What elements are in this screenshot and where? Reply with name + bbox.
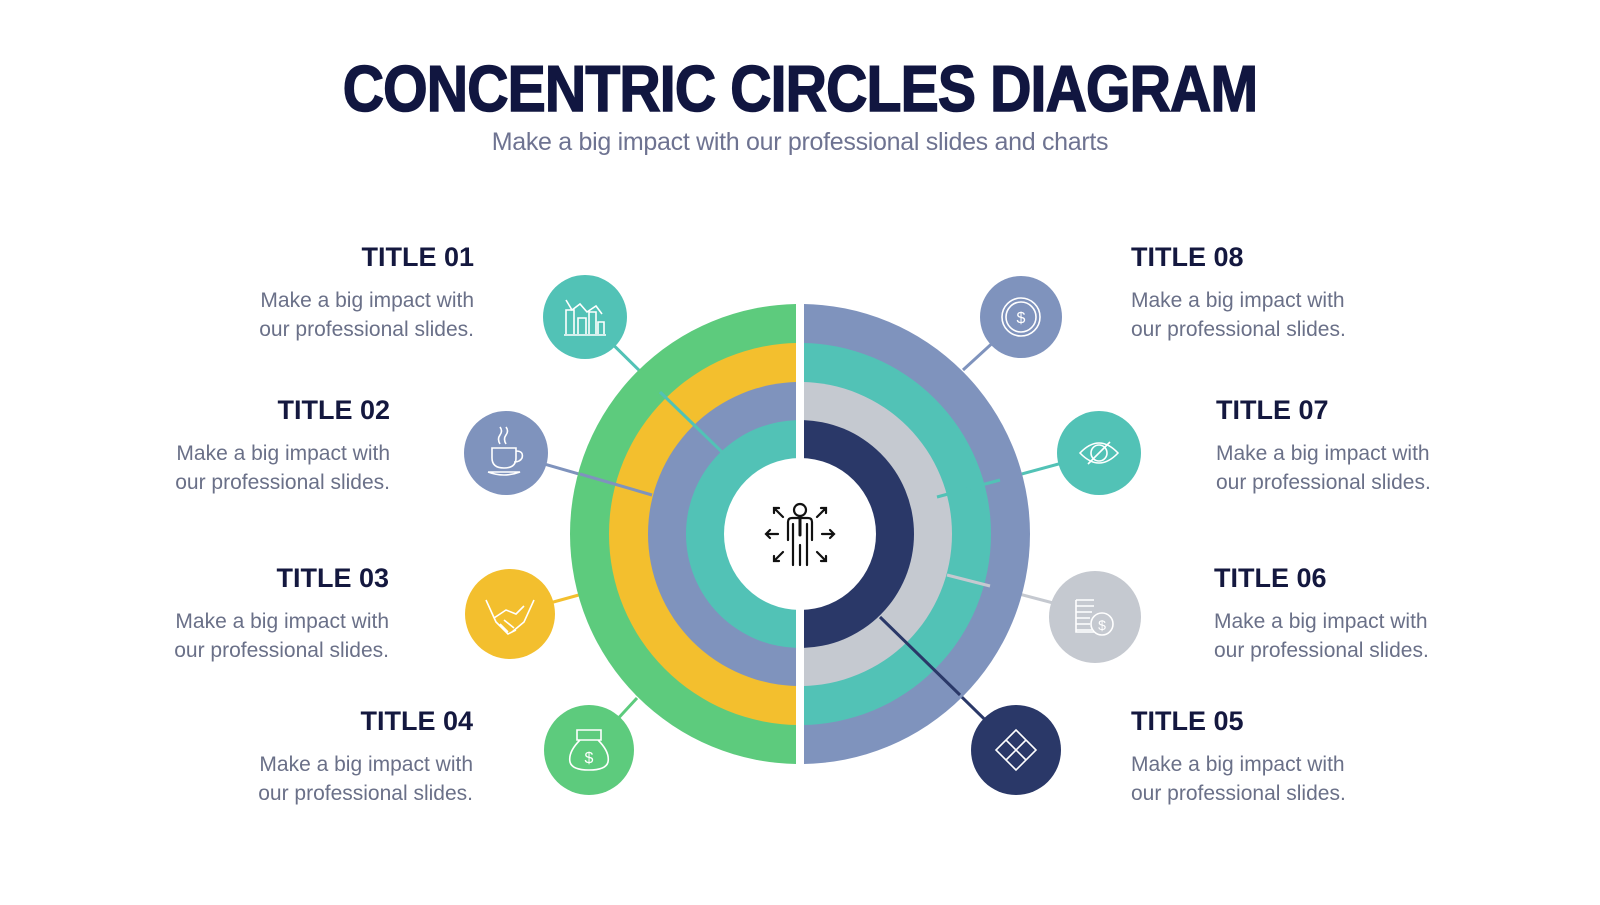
text block: Title 08: TITLE 08 [1131, 242, 1244, 272]
text block: Title 07: Make a big impact with [1216, 442, 1430, 465]
concentric half rings: left [570, 304, 796, 764]
text block: Title 08: our professional slides. [1131, 318, 1346, 341]
text block: Title 04: TITLE 04 [360, 706, 473, 736]
center icon: person with arrows [766, 504, 834, 565]
text block: Title 02: Make a big impact with [176, 442, 390, 465]
icon: eye (07) [1057, 411, 1141, 495]
text block: Title 03 [174, 563, 389, 662]
text block: Title 07 [1216, 395, 1431, 494]
text block: Title 04 [258, 706, 473, 805]
redraw connector segments over rings [580, 392, 1000, 695]
text block: Title 02 [175, 395, 390, 494]
icon: coin (08) [980, 276, 1062, 358]
text block: Title 08 [1131, 242, 1346, 341]
icon: money bag (04) [544, 705, 634, 795]
text block: Title 02: our professional slides. [175, 471, 390, 494]
title: CONCENTRIC CIRCLES DIAGRAM [343, 53, 1257, 125]
text block: Title 01 [259, 242, 474, 341]
text block: Title 04: our professional slides. [258, 782, 473, 805]
text block: Title 06: our professional slides. [1214, 639, 1429, 662]
text block: Title 01: our professional slides. [259, 318, 474, 341]
icon: handshake (03) [465, 569, 555, 659]
text block: Title 08: Make a big impact with [1131, 289, 1345, 312]
icon: puzzle (05) [971, 705, 1061, 795]
text block: Title 06 [1214, 563, 1429, 662]
text block: Title 05: TITLE 05 [1131, 706, 1244, 736]
text block: Title 07: our professional slides. [1216, 471, 1431, 494]
text block: Title 03: our professional slides. [174, 639, 389, 662]
text block: Title 06: Make a big impact with [1214, 610, 1428, 633]
text block: Title 04: Make a big impact with [259, 753, 473, 776]
text block: Title 03: Make a big impact with [175, 610, 389, 633]
text block: Title 05 [1131, 706, 1346, 805]
icon: coins (06) [1049, 571, 1141, 663]
subtitle: Make a big impact with our professional slides and charts [492, 128, 1108, 156]
icon: money bag (04): $ [585, 750, 594, 767]
icon: coin (08): $ [1017, 310, 1026, 327]
connector lines [506, 317, 1099, 750]
text block: Title 01: Make a big impact with [260, 289, 474, 312]
text block: Title 05: Make a big impact with [1131, 753, 1345, 776]
concentric half rings: right [804, 304, 1030, 764]
center white circle [724, 458, 876, 610]
text block: Title 01: TITLE 01 [361, 242, 474, 272]
text block: Title 03: TITLE 03 [276, 563, 389, 593]
icon: coffee (02) [464, 411, 548, 495]
icon: chart (01) [543, 275, 627, 359]
text block: Title 02: TITLE 02 [277, 395, 390, 425]
text block: Title 07: TITLE 07 [1216, 395, 1329, 425]
text block: Title 05: our professional slides. [1131, 782, 1346, 805]
text block: Title 06: TITLE 06 [1214, 563, 1327, 593]
icon: coins (06): $ [1098, 617, 1106, 633]
